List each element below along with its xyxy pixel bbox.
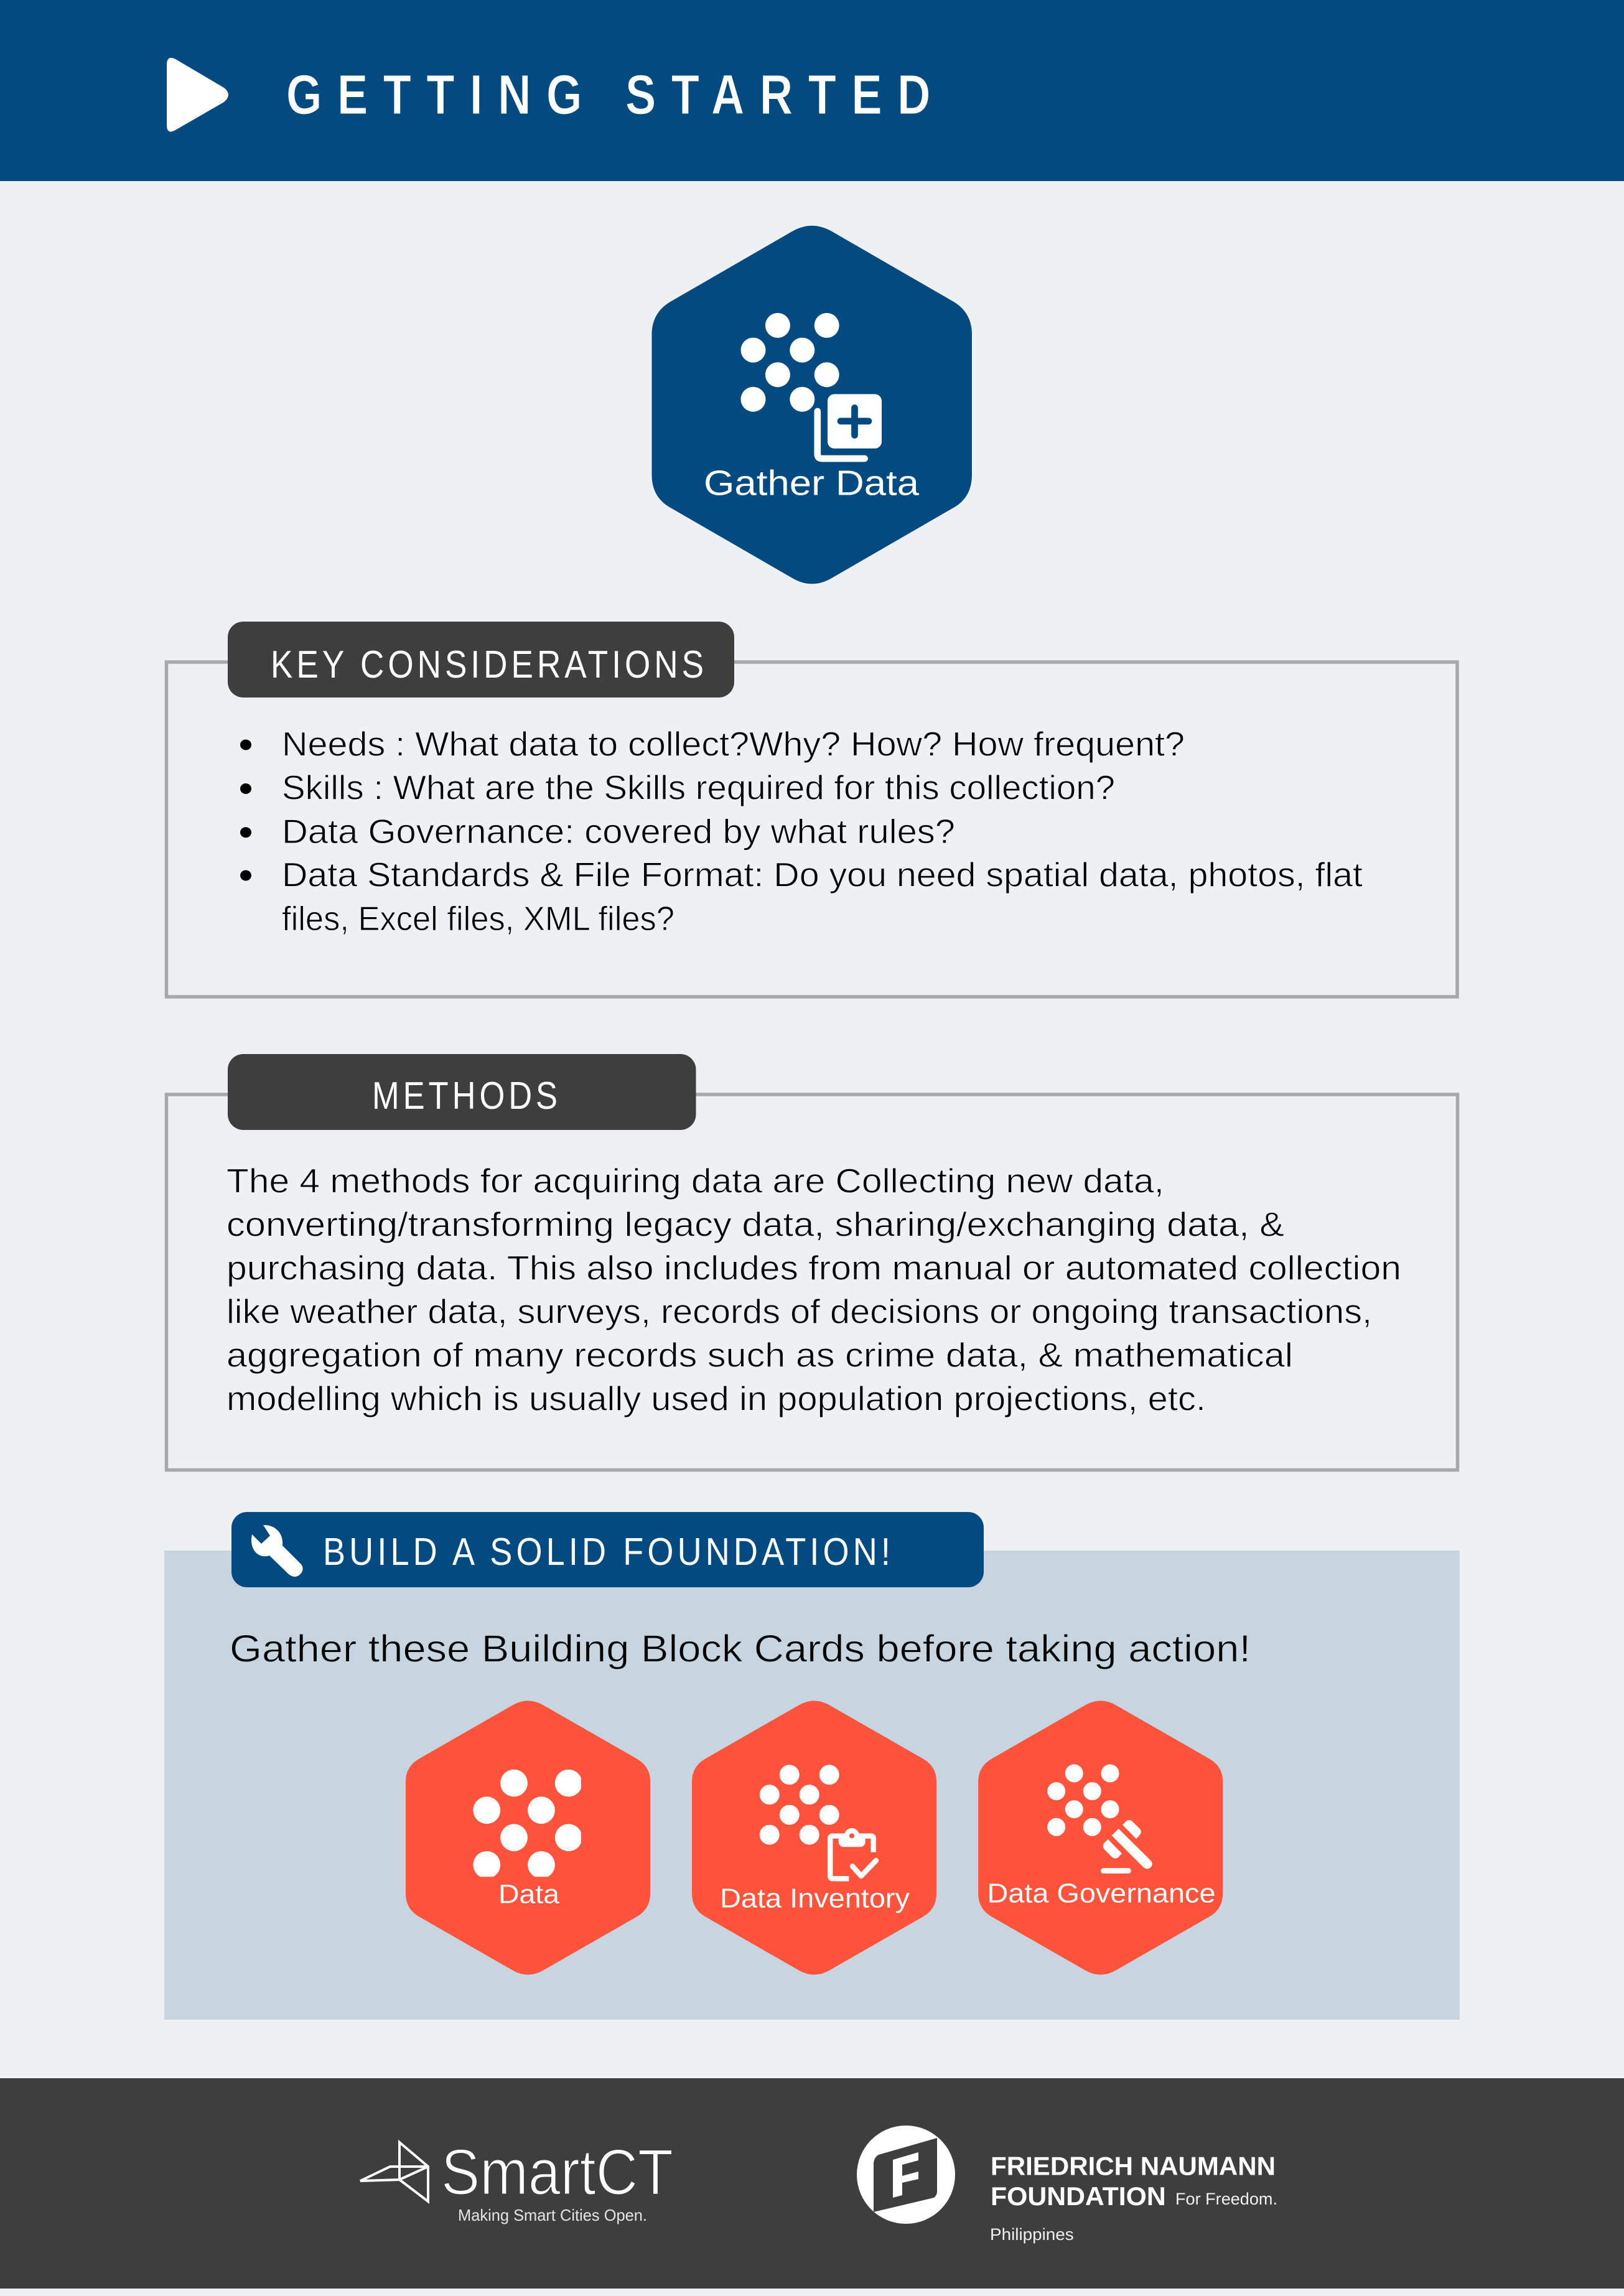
icon: gavel [1101, 1820, 1152, 1874]
heading: key considerations [228, 622, 734, 698]
heading: build a solid foundation [231, 1512, 984, 1587]
icon: data dots [740, 313, 839, 412]
panel: key considerations [167, 622, 1457, 997]
heading: build a solid foundation: BUILD A SOLID FOUNDATION! [323, 1531, 894, 1574]
logo: friedrich naumann foundation: Philippines [990, 2225, 1074, 2244]
icon: clipboard check [830, 1828, 876, 1878]
heading: key considerations: KEY CONSIDERATIONS [271, 643, 707, 686]
bullet list: Needs : What data to collect?Why? How? How frequent? [282, 724, 1185, 763]
icon: add layer [818, 394, 882, 459]
card label: Data Inventory [720, 1883, 910, 1914]
methods paragraph [226, 1162, 1401, 1418]
title: GETTING STARTED [286, 64, 946, 126]
bullet list: Data Governance: covered by what rules? [282, 812, 955, 851]
bullet list: files, Excel files, XML files? [282, 899, 674, 938]
icon: data dots [1047, 1765, 1119, 1836]
card label: Data Governance [987, 1878, 1216, 1908]
card: data [406, 1701, 650, 1975]
icon: data dots [473, 1770, 582, 1878]
logo: friedrich naumann foundation [857, 2126, 1277, 2244]
methods paragraph: purchasing data. This also includes from manual or automated collection [226, 1248, 1401, 1287]
bullet list: Data Standards & File Format: Do you need spatial data, photos, flat [282, 856, 1363, 894]
methods paragraph: like weather data, surveys, records of decisions or ongoing transactions, [226, 1292, 1372, 1330]
icon: play triangle [167, 58, 228, 132]
methods paragraph: The 4 methods for acquiring data are Collecting new data, [226, 1162, 1164, 1200]
card label: Data [498, 1879, 559, 1909]
methods paragraph: modelling which is usually used in population projections, etc. [226, 1379, 1206, 1418]
icon: data dots [760, 1765, 839, 1845]
methods paragraph: aggregation of many records such as crime data, & mathematical [226, 1335, 1293, 1374]
bullet list [240, 724, 1363, 938]
logo: friedrich naumann foundation: For Freedom. [1175, 2190, 1277, 2208]
logo: friedrich naumann foundation: FRIEDRICH NAUMANN [991, 2152, 1276, 2181]
badge: gather data hexagon [652, 226, 972, 584]
heading: methods: METHODS [372, 1075, 561, 1118]
methods paragraph: converting/transforming legacy data, sharing/exchanging data, & [226, 1205, 1284, 1244]
footer [0, 2078, 1624, 2289]
bullet list: Skills : What are the Skills required for this collection? [282, 768, 1115, 807]
logo: smartct: SmartCT [441, 2137, 673, 2209]
logo: smartct: Making Smart Cities Open. [458, 2206, 647, 2224]
card: data inventory [692, 1701, 936, 1975]
panel: methods [167, 1054, 1457, 1470]
badge label: Gather Data [704, 463, 919, 503]
card: data governance [978, 1701, 1223, 1975]
logo: smartct [360, 2137, 673, 2224]
icon: wrench [251, 1525, 303, 1577]
header banner [0, 0, 1624, 181]
logo: friedrich naumann foundation: FOUNDATION [991, 2182, 1166, 2211]
subheading: Gather these Building Block Cards before taking action! [230, 1628, 1251, 1670]
heading: methods [228, 1054, 696, 1130]
panel: build a solid foundation [164, 1512, 1460, 2020]
